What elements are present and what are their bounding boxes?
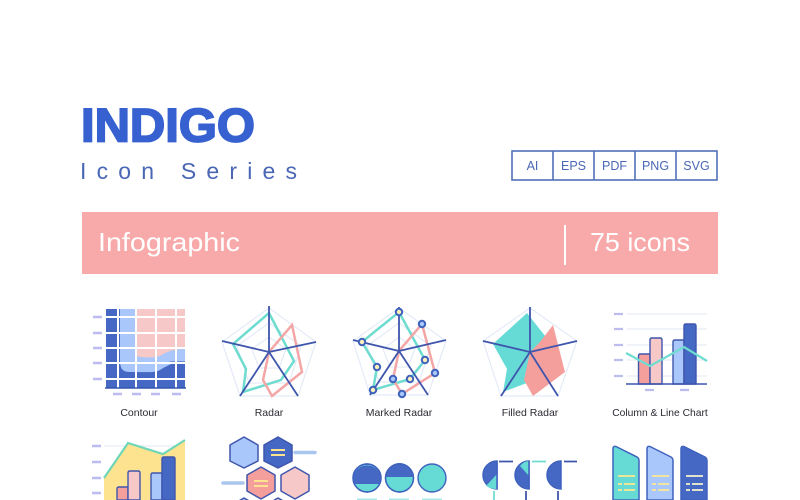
label: radar: Radar bbox=[255, 407, 284, 419]
label: marked radar: Marked Radar bbox=[366, 407, 433, 419]
icon: area and column chart bbox=[92, 440, 185, 500]
file format boxes: SVG bbox=[683, 159, 710, 173]
title: INDIGO bbox=[81, 100, 255, 152]
file format boxes: AI bbox=[527, 159, 538, 173]
file format boxes bbox=[512, 151, 717, 180]
file format boxes: PNG bbox=[642, 159, 669, 173]
icon: marked radar bbox=[353, 307, 446, 397]
label: filled radar: Filled Radar bbox=[502, 407, 559, 419]
category banner: Infographic bbox=[98, 227, 240, 257]
label: contour: Contour bbox=[120, 407, 158, 419]
icon: tag columns bbox=[613, 446, 707, 500]
category banner: 75 icons bbox=[590, 227, 690, 257]
icon: hexagon grid bbox=[223, 437, 315, 500]
file format boxes: EPS bbox=[561, 159, 586, 173]
icon: half pie charts bbox=[483, 461, 577, 500]
icon: radar bbox=[222, 306, 316, 396]
subtitle: Icon Series bbox=[80, 158, 297, 184]
icon: filled circles bbox=[353, 463, 446, 500]
icon: contour bbox=[93, 309, 186, 394]
file format boxes: PDF bbox=[602, 159, 627, 173]
category banner bbox=[82, 212, 718, 274]
label: column and line chart: Column & Line Chart bbox=[612, 408, 708, 419]
icon: column and line chart bbox=[614, 314, 707, 390]
icon: filled radar bbox=[483, 307, 577, 396]
